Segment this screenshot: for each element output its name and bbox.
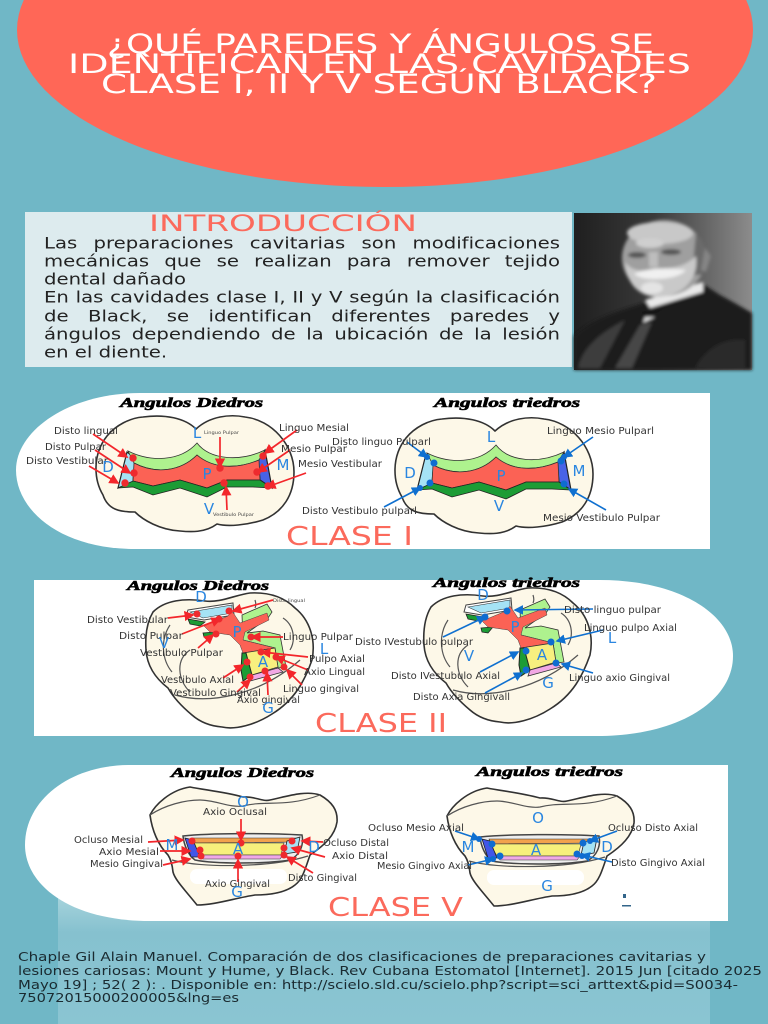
tooth [146,593,313,728]
title banner [17,0,753,187]
lower light panel [58,893,710,1024]
intro text [44,234,560,364]
heading: angulos triedros: Angulos triedros [474,764,623,779]
heading: angulos diedros: Angulos Diedros [118,395,263,410]
arrows [89,430,306,510]
labels: Disto Axia Gingivall [413,692,510,703]
labels: Axio Mesial [99,847,159,858]
labels: D [102,458,114,476]
panel: clase I [16,393,710,552]
labels: L [487,428,496,446]
labels: Linguo Pulpar [204,430,239,436]
labels [26,423,382,518]
labels: Disto IVestubulo pulpar [355,637,473,648]
labels: Ocluso Disto Axial [608,823,698,834]
labels: V [494,497,505,515]
arrows [148,819,325,882]
labels: Ocluso Mesio Axial [368,823,464,834]
labels: Vestibulo Pulpar [140,648,223,659]
labels: Disto Gingival [288,873,357,884]
panel: introducción [25,211,572,367]
labels: Disto Vestibular [87,615,168,626]
clase V triedros diagram [368,764,705,906]
labels: G [231,883,243,901]
labels: Disto Vestibular [26,456,108,467]
labels [302,426,660,524]
labels: L [193,424,202,442]
clase II diedros diagram [87,578,365,728]
clase V diedros diagram [74,765,389,905]
labels [87,588,365,717]
labels: L [608,629,617,647]
labels: Vestibulo Pulpar [213,512,254,518]
labels: Pulpo Axial [309,654,365,665]
intro text: en el diente. [44,342,167,361]
labels: Mesio Gingival [90,859,163,870]
labels: G [262,699,274,717]
labels: D [195,588,207,606]
labels: O [237,793,249,811]
labels: Disto linguo pulpar [564,605,661,616]
labels: Linguo pulpo Axial [584,623,677,634]
arrows [455,831,617,865]
clase II white shape [34,580,733,736]
labels: Disto Pulpar [119,631,183,642]
labels: Disto IVestubulo Axial [391,671,500,682]
labels: Mesio Pulpar [281,444,347,455]
labels: Axio Lingual [304,667,365,678]
labels: L [320,640,329,658]
labels: Linguo axio Gingival [569,673,670,684]
labels: Linguo Mesio Pulparl [547,426,654,437]
labels: Disto Gingivo Axial [611,858,705,869]
labels: M [462,838,474,856]
intro text: mecánicas que se realizan para remover tejido [44,252,560,271]
labels: Disto Vestibulo pulparl [302,506,417,517]
reference citation: Chaple Gil Alain Manuel. Comparación de dos clasificaciones de preparaciones cavitarias y [18,949,707,964]
labels: P [232,623,242,641]
clase V white shape [25,765,728,921]
intro background [25,212,572,367]
labels: Disto Pulpar [45,442,106,453]
labels: P [202,465,212,483]
labels: Mesio Gingivo Axial [377,861,472,872]
title text: CLASE I, II Y V SEGÚN BLACK? [101,68,657,100]
labels: Vestibulo Axial [161,675,234,686]
clase II label: CLASE II [315,709,447,739]
labels: Mesio Vestibulo Pulpar [543,513,660,524]
labels: Linguo gingival [283,684,359,695]
labels: V [204,500,215,518]
labels: G [542,674,554,692]
labels: A [531,841,542,859]
arrows [443,608,603,693]
labels: M [166,836,178,854]
clase V label: CLASE V [328,893,463,923]
labels: Linguo Mesial [279,423,349,434]
portrait of G. V. Black [574,213,752,370]
labels: V [159,634,170,652]
title text: IDENTIFICAN EN LAS CAVIDADES [68,49,691,80]
labels: P [510,618,520,636]
labels: A [233,840,244,858]
labels: Axio Distal [332,851,388,862]
reference citation: 75072015000200005&lng=es [18,990,239,1005]
labels: Ocluso Mesial [74,835,143,846]
title text [68,28,691,100]
heading: angulos triedros: Angulos triedros [432,395,580,410]
labels: Linguo Pulpar [283,632,353,643]
labels: M [277,456,289,474]
labels [355,586,677,703]
intro heading: INTRODUCCIÓN [149,211,417,237]
tooth [150,787,337,905]
labels: Disto linguo Pulparl [332,437,431,448]
labels: O [532,809,544,827]
tooth [424,588,591,723]
tooth [395,418,593,534]
intro text: dental dañado [44,270,186,289]
labels: M [573,462,585,480]
labels: A [537,646,548,664]
labels: Axio Oclusal [203,807,267,818]
labels: Disto lingual [273,598,305,604]
labels: Ocluso Distal [323,838,389,849]
intro text: de Black, se identifican diferentes paredes y [44,306,560,325]
tooth [447,788,634,906]
reference citation [18,949,762,1005]
heading: angulos triedros: Angulos triedros [431,575,580,590]
intro text: ángulos dependiendo de la ubicación de la lesión [44,324,560,343]
clase II triedros diagram [355,575,677,723]
labels [74,793,389,901]
tooth [96,416,294,532]
labels: Vestibulo Gingival [170,688,261,699]
arrows [168,600,308,695]
intro text: En las cavidades clase I, II y V según la clasificación [44,288,560,307]
labels: V [464,647,475,665]
title text: ¿QUÉ PAREDES Y ÁNGULOS SE [107,28,654,60]
panel: clase II [34,575,733,739]
labels: A [258,653,269,671]
clase I diedros diagram [26,395,382,532]
labels: Axio gingival [237,695,300,706]
clase I triedros diagram [302,395,660,534]
labels: Axio Gingival [205,879,270,890]
clase I label: CLASE I [286,522,413,552]
labels: Disto lingual [54,426,118,437]
labels: D [601,838,613,856]
coral ellipse [17,0,753,187]
heading: angulos diedros: Angulos Diedros [125,578,269,593]
panel: clase V [25,764,728,923]
clase I white shape [16,393,710,549]
arrows [384,437,606,510]
labels: D [308,838,320,856]
heading: angulos diedros: Angulos Diedros [169,765,314,780]
labels [368,809,705,906]
reference citation: Mayo 19] ; 52( 2 ): . Disponible en: http://scielo.sld.cu/scielo.php?script=sci_arttext&pid=S0034- [18,977,738,992]
reference citation: lesiones cariosas: Mount y Hume, y Black. Rev Cubana Estomatol [Internet]. 2015 Jun [citado 2025 [18,963,762,978]
labels: P [496,467,506,485]
labels: G [541,877,553,895]
labels: D [477,586,489,604]
labels: D [404,464,416,482]
labels: Mesio Vestibular [298,459,382,470]
